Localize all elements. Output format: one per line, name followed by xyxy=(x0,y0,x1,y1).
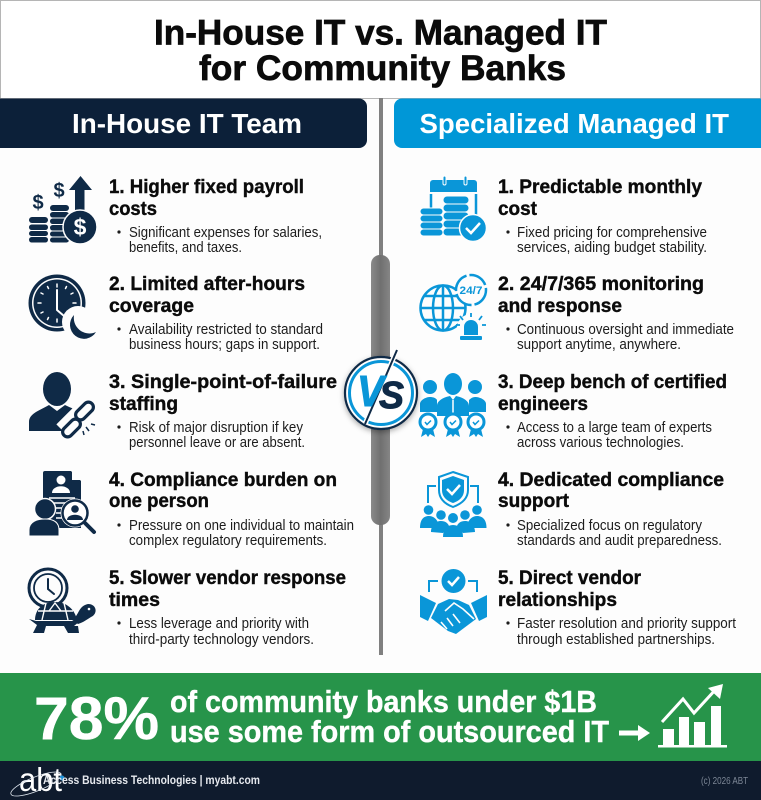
footer xyxy=(0,761,761,800)
stat text: use some form of outsourced IT xyxy=(170,714,609,749)
item 2: limited coverage xyxy=(28,273,323,353)
heading xyxy=(109,176,304,220)
detail xyxy=(506,225,707,256)
detail: standards and audit preparedness. xyxy=(517,533,722,549)
heading: 3. Single-point-of-failure xyxy=(109,371,337,393)
detail: Less leverage and priority with xyxy=(129,616,309,632)
heading: 1. Predictable monthly xyxy=(498,176,702,198)
heading xyxy=(498,371,727,415)
heading: 1. Higher fixed payroll xyxy=(109,176,304,198)
icon: calendar, coins and check xyxy=(420,176,486,242)
icon: globe, clock and siren: 24/7 xyxy=(460,285,482,297)
panel: in-house IT column xyxy=(28,176,354,648)
heading: relationships xyxy=(498,589,617,611)
detail: services, aiding budget stability. xyxy=(517,240,707,256)
stat text xyxy=(170,684,609,749)
item 5: slower vendor response xyxy=(29,567,346,648)
panel: managed IT column xyxy=(420,176,736,648)
logo: abt: abt xyxy=(19,761,62,798)
icon: coins and rising arrow: $ xyxy=(74,214,87,240)
icon: person and broken chain xyxy=(29,372,102,446)
detail xyxy=(117,616,314,648)
header: Specialized Managed IT: Specialized Managed IT xyxy=(420,108,729,139)
detail: benefits, and taxes. xyxy=(129,240,242,256)
heading: engineers xyxy=(498,393,588,415)
heading: 5. Slower vendor response xyxy=(109,567,346,589)
heading: staffing xyxy=(109,393,178,415)
detail: complex regulatory requirements. xyxy=(129,533,327,549)
icon: growth chart xyxy=(658,684,727,748)
item 1: predictable cost xyxy=(420,176,707,256)
stat text: of community banks under $1B xyxy=(170,684,597,719)
VS badge: V xyxy=(357,367,387,416)
detail: business hours; gaps in support. xyxy=(129,337,320,353)
detail xyxy=(117,518,354,549)
icon: handshake and check xyxy=(420,569,487,634)
heading: 4. Compliance burden on xyxy=(109,469,337,491)
title: In-House IT vs. Managed IT xyxy=(154,14,607,52)
icon: clock and moon xyxy=(28,274,96,339)
detail: support anytime, anywhere. xyxy=(517,337,681,353)
heading: one person xyxy=(109,490,209,512)
icon: coins and rising arrow xyxy=(29,176,97,244)
heading: 4. Dedicated compliance xyxy=(498,469,724,491)
arrow xyxy=(619,725,650,741)
item 2: 24/7/365 monitoring xyxy=(420,273,734,353)
detail: Risk of major disruption if key xyxy=(129,420,304,436)
item 5: direct vendor relationships xyxy=(420,567,736,648)
detail: Specialized focus on regulatory xyxy=(517,518,703,534)
big stat: 78% xyxy=(34,685,159,752)
icon: globe, clock and siren xyxy=(420,275,486,342)
detail xyxy=(506,616,736,648)
detail: Fixed pricing for comprehensive xyxy=(517,225,707,241)
icon: shield and team xyxy=(420,472,486,537)
header: In-House IT Team xyxy=(0,98,367,148)
detail xyxy=(506,518,722,549)
detail: personnel leave or are absent. xyxy=(129,435,305,451)
detail: third-party technology vendors. xyxy=(129,632,314,648)
copyright: (c) 2026 ABT xyxy=(701,776,748,787)
detail: Significant expenses for salaries, xyxy=(129,225,322,241)
heading: 5. Direct vendor xyxy=(498,567,641,589)
VS badge xyxy=(344,350,418,430)
detail: Access to a large team of experts xyxy=(517,420,712,436)
heading: coverage xyxy=(109,295,194,317)
icon: engineers with medals xyxy=(420,373,486,437)
heading: 2. 24/7/365 monitoring xyxy=(498,273,704,295)
detail: Faster resolution and priority support xyxy=(517,616,736,632)
item 4: compliance burden xyxy=(29,469,354,549)
heading xyxy=(109,371,337,415)
detail: Pressure on one individual to maintain xyxy=(129,518,354,534)
item 3: single point of failure xyxy=(29,371,337,451)
heading xyxy=(498,176,702,220)
heading: cost xyxy=(498,198,537,220)
icon: turtle with clock xyxy=(29,569,96,633)
heading: times xyxy=(109,589,160,611)
item 1: higher payroll xyxy=(29,176,322,256)
detail: Availability restricted to standard xyxy=(129,322,323,338)
footer text: Access Business Technologies | myabt.com xyxy=(43,775,260,787)
heading xyxy=(498,567,641,611)
item 3: certified engineers xyxy=(420,371,727,451)
detail xyxy=(506,420,712,451)
detail xyxy=(117,322,323,353)
heading: support xyxy=(498,490,569,512)
header: In-House IT Team: In-House IT Team xyxy=(72,108,302,139)
title xyxy=(0,0,760,98)
detail: across various technologies. xyxy=(517,435,684,451)
header: Specialized Managed IT xyxy=(394,98,761,148)
heading xyxy=(109,469,337,512)
heading xyxy=(498,469,724,512)
heading xyxy=(109,273,305,317)
item 4: dedicated compliance xyxy=(420,469,724,549)
heading: 3. Deep bench of certified xyxy=(498,371,727,393)
heading: costs xyxy=(109,198,157,220)
heading xyxy=(498,273,704,317)
heading: 2. Limited after-hours xyxy=(109,273,305,295)
detail xyxy=(117,420,305,451)
detail xyxy=(506,322,734,353)
stat banner xyxy=(0,673,761,761)
heading: and response xyxy=(498,295,622,317)
icon: document, person and magnifier xyxy=(29,471,94,536)
title: for Community Banks xyxy=(199,49,566,88)
detail: Continuous oversight and immediate xyxy=(517,322,734,338)
center divider pill xyxy=(371,255,390,525)
detail xyxy=(117,225,322,256)
VS badge: S xyxy=(379,375,404,417)
heading xyxy=(109,567,346,611)
detail: through established partnerships. xyxy=(517,632,715,648)
icon: coins and rising arrow: $ xyxy=(53,180,65,202)
icon: coins and rising arrow: $ xyxy=(32,192,44,214)
